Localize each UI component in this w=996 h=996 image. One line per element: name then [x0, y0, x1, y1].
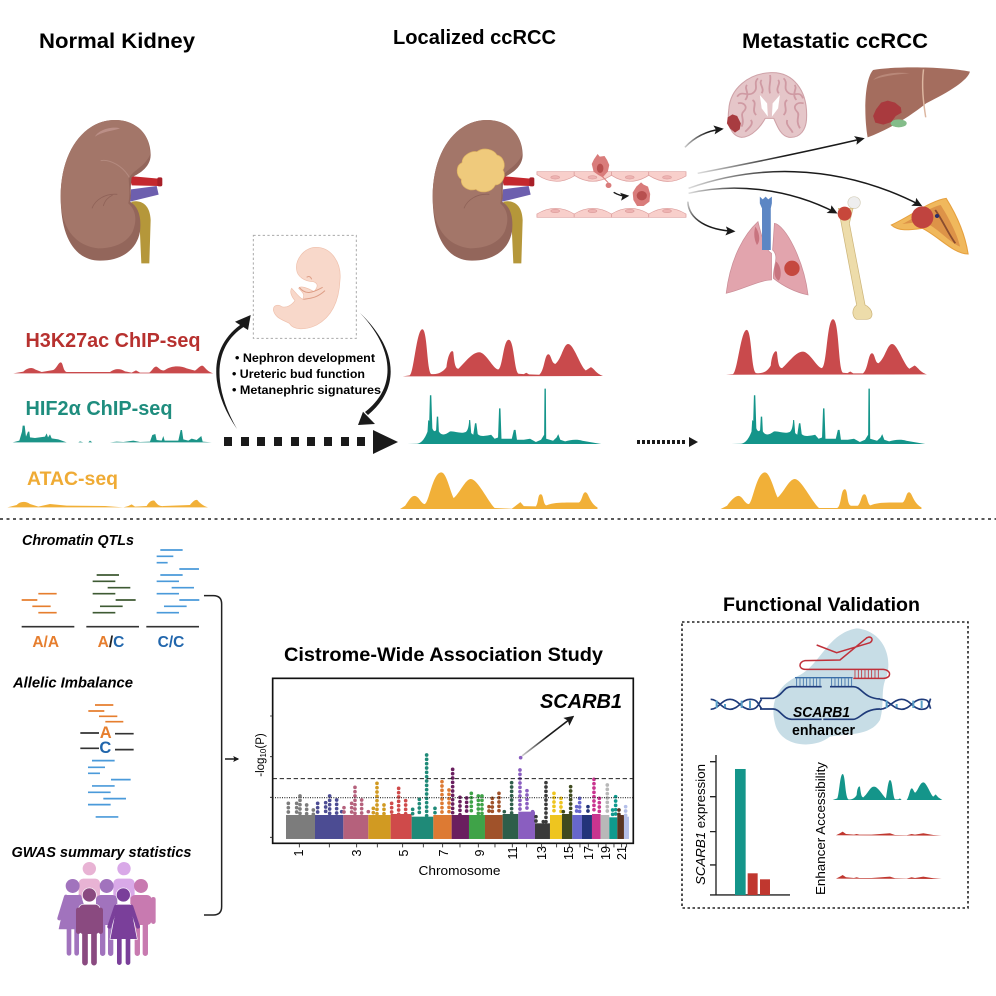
arrow: to association study — [225, 758, 238, 760]
x axis numbers: 15 — [562, 846, 576, 860]
chart: Manhattan plot — [255, 678, 633, 878]
label: H3K27ac ChIP-seq: H3K27ac ChIP-seq — [26, 330, 200, 352]
arrow: SCARB1 callout — [522, 717, 573, 756]
panel: functional validation — [682, 622, 968, 908]
x axis numbers: 21 — [615, 846, 629, 860]
tracks: normal kidney — [7, 362, 213, 507]
icon: kidney with tumor — [433, 120, 534, 263]
arrow: small dotted progression — [637, 437, 698, 447]
heading: Metastatic ccRCC: Metastatic ccRCC — [742, 29, 928, 53]
heading: Cistrome-Wide Association Study: Cistrome-Wide Association Study — [284, 644, 603, 666]
x axis numbers: 5 — [397, 849, 411, 856]
x axis numbers: 1 — [292, 849, 306, 856]
vessel: endothelial cells — [537, 172, 686, 217]
text block: developmental signatures — [232, 351, 381, 397]
icon: adrenal gland — [891, 198, 968, 254]
enhancer label: enhancer — [792, 723, 855, 739]
x axis title: Chromosome — [418, 863, 500, 878]
arrow: embryo to localized — [358, 313, 391, 425]
y axis label: -log — [255, 758, 267, 777]
heading: GWAS summary statistics: GWAS summary statistics — [12, 845, 192, 861]
icon: liver — [865, 67, 970, 137]
icon: embryo in dashed box — [253, 235, 356, 338]
SCARB1 label: SCARB1 — [540, 691, 622, 713]
label: HIF2a ChIP-seq: HIF2α ChIP-seq — [26, 398, 172, 420]
icon: femur bone — [838, 197, 872, 319]
tracks: localized ccRCC — [400, 329, 603, 509]
tumor — [457, 149, 504, 192]
genotype labels: A/A — [32, 634, 59, 651]
panel: data inputs — [12, 533, 238, 963]
genotype labels — [32, 634, 184, 757]
icon: lungs — [726, 197, 808, 295]
heading: Chromatin QTLs: Chromatin QTLs — [22, 533, 134, 549]
genotype labels: A/C — [98, 634, 124, 651]
y axis label: 10 — [259, 748, 268, 758]
heading: Normal Kidney: Normal Kidney — [39, 29, 195, 53]
text block: developmental signatures: • Metanephric signatures — [232, 383, 381, 397]
arrows: metastatic spread — [685, 129, 921, 231]
bracket — [204, 596, 222, 915]
text block: developmental signatures: • Ureteric bud function — [232, 367, 365, 381]
chromosome blocks — [286, 812, 629, 839]
genotype labels: C/C — [158, 634, 184, 651]
y label: Enhancer Accessibility: Enhancer Accessibility — [813, 761, 828, 895]
association points — [288, 755, 626, 823]
x axis numbers: 3 — [350, 849, 364, 856]
arrow: thick dotted progression — [224, 430, 398, 454]
x axis numbers: 17 — [582, 846, 596, 860]
heading: Functional Validation: Functional Validation — [723, 595, 920, 616]
x axis numbers — [292, 846, 629, 860]
sequencing reads — [22, 550, 199, 817]
icon: CRISPR targeting enhancer — [711, 628, 931, 744]
plot frame — [273, 678, 633, 843]
x axis numbers: 13 — [535, 846, 549, 860]
x axis numbers: 7 — [437, 849, 451, 856]
y label: SCARB1 expression: SCARB1 expression — [693, 764, 708, 885]
genotype labels: A — [100, 724, 112, 742]
heading: Allelic Imbalance: Allelic Imbalance — [12, 676, 133, 692]
heading: Localized ccRCC: Localized ccRCC — [393, 27, 556, 49]
arrow: normal to embryo — [216, 315, 251, 429]
metastasis organs and arrows — [537, 67, 970, 319]
icon: brain — [727, 73, 807, 137]
tracks: metastatic ccRCC — [721, 319, 927, 509]
genotype labels: C — [99, 739, 111, 757]
chart: SCARB1 expression bars — [710, 755, 790, 896]
label: ATAC-seq: ATAC-seq — [27, 468, 118, 490]
x axis numbers: 9 — [473, 849, 487, 856]
chart: enhancer accessibility tracks — [833, 774, 942, 879]
y axis label: (P) — [255, 733, 267, 749]
icon: people group — [59, 862, 153, 963]
x axis numbers: 19 — [599, 846, 613, 860]
x axis numbers: 11 — [506, 846, 520, 859]
text block: developmental signatures: • Nephron development — [235, 351, 375, 365]
icon: normal kidney — [61, 120, 162, 263]
icon: migrating tumor cells — [592, 154, 650, 206]
SCARB1 enhancer label: SCARB1 — [793, 705, 850, 721]
